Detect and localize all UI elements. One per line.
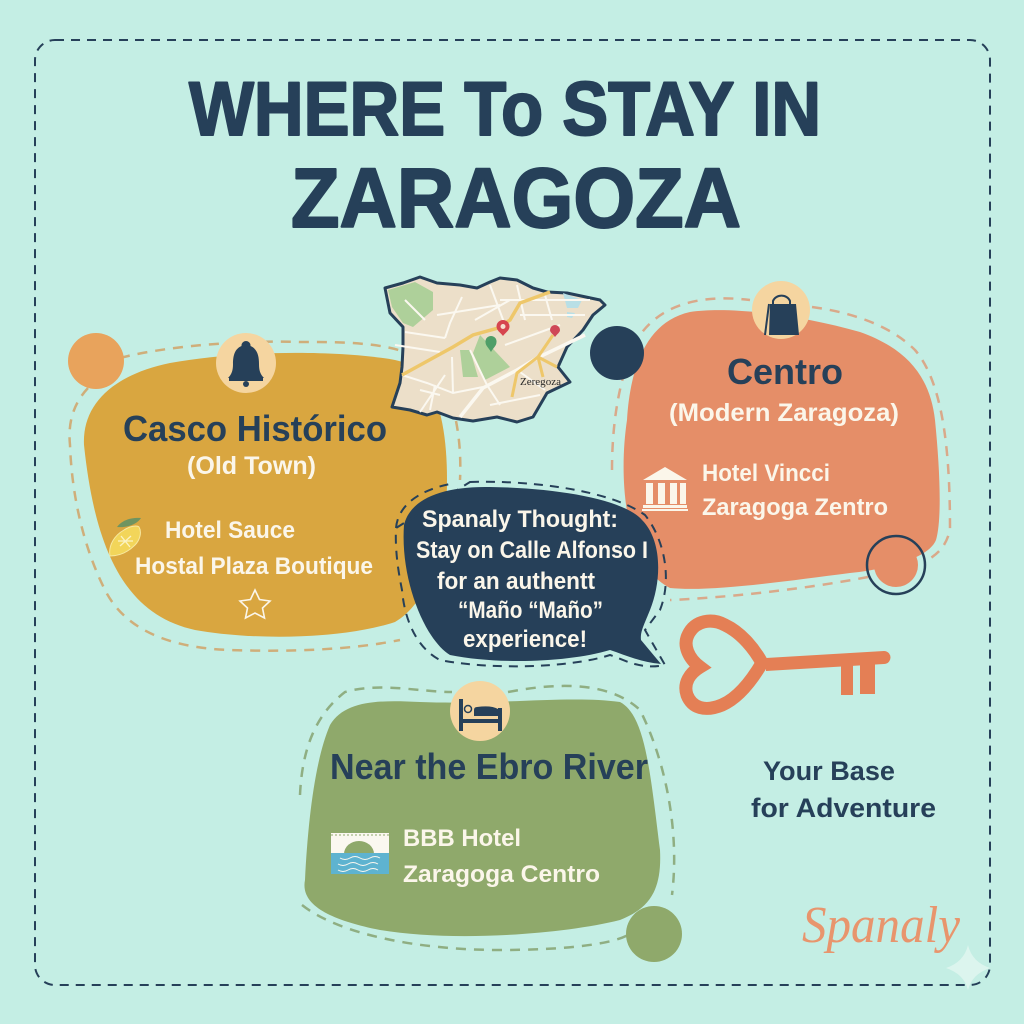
panel: Centro — [590, 281, 950, 600]
icon: lemon — [110, 518, 141, 556]
hotel list: Centro: Zaragoga Zentro — [702, 494, 888, 521]
subheading: Modern Zaragoza: (Modern Zaragoza) — [669, 399, 899, 427]
decorative circle: green — [626, 906, 682, 962]
heading: Casco Historico: Casco Histórico — [123, 408, 387, 449]
hotel list: Near the Ebro River — [403, 825, 600, 888]
decorative ring — [867, 536, 925, 594]
hotel list: Casco Historico: Hotel Sauce — [165, 517, 295, 544]
heading: Near the Ebro River: Near the Ebro River — [330, 746, 648, 787]
icon: bell — [216, 333, 276, 393]
hotel list: Near the Ebro River: BBB Hotel — [403, 825, 521, 852]
hotel list: Casco Historico — [135, 517, 373, 580]
panel: map: Zeregoza — [520, 377, 562, 388]
tagline — [751, 756, 936, 823]
hotel list: Near the Ebro River: Zaragoga Centro — [403, 861, 600, 888]
icon: bed — [450, 681, 510, 741]
title: WHERE To STAY IN — [189, 67, 821, 152]
bubble text — [416, 506, 648, 653]
bubble text: for an authentt — [437, 568, 595, 595]
bubble text: “Maño “Maño” — [458, 597, 603, 624]
bubble text: Stay on Calle Alfonso I — [416, 537, 648, 564]
hotel list: Centro: Hotel Vincci — [702, 460, 830, 487]
decorative circle: orange — [68, 333, 124, 389]
hotel list: Centro — [702, 460, 888, 521]
subheading: Old Town: (Old Town) — [187, 452, 316, 480]
decorative circle: navy — [590, 326, 644, 380]
icon: shopping bag — [752, 281, 810, 339]
heading: Centro: Centro — [727, 351, 843, 392]
brand logo: Spanaly: Spanaly — [802, 897, 961, 954]
title — [189, 67, 821, 245]
icon: bridge over water — [331, 833, 389, 874]
bubble text: Spanaly Thought: — [422, 506, 618, 533]
map pin: red — [496, 320, 510, 336]
map pin: green — [485, 336, 497, 352]
panel: Near the Ebro River — [300, 681, 682, 962]
panel: speech bubble — [396, 482, 666, 666]
tagline: for Adventure — [751, 793, 936, 823]
tagline: Your Base — [763, 756, 895, 786]
icon: temple — [642, 467, 688, 511]
title: ZARAGOZA — [291, 151, 741, 245]
sparkle — [946, 945, 990, 990]
hotel list: Casco Historico: Hostal Plaza Boutique — [135, 553, 373, 580]
panel: Casco Historico — [68, 333, 460, 651]
panel: map — [385, 277, 605, 422]
icon: star — [240, 590, 270, 618]
icon: heart key — [686, 621, 890, 708]
map pin: small red — [550, 325, 560, 337]
bubble text: experience! — [463, 626, 587, 653]
